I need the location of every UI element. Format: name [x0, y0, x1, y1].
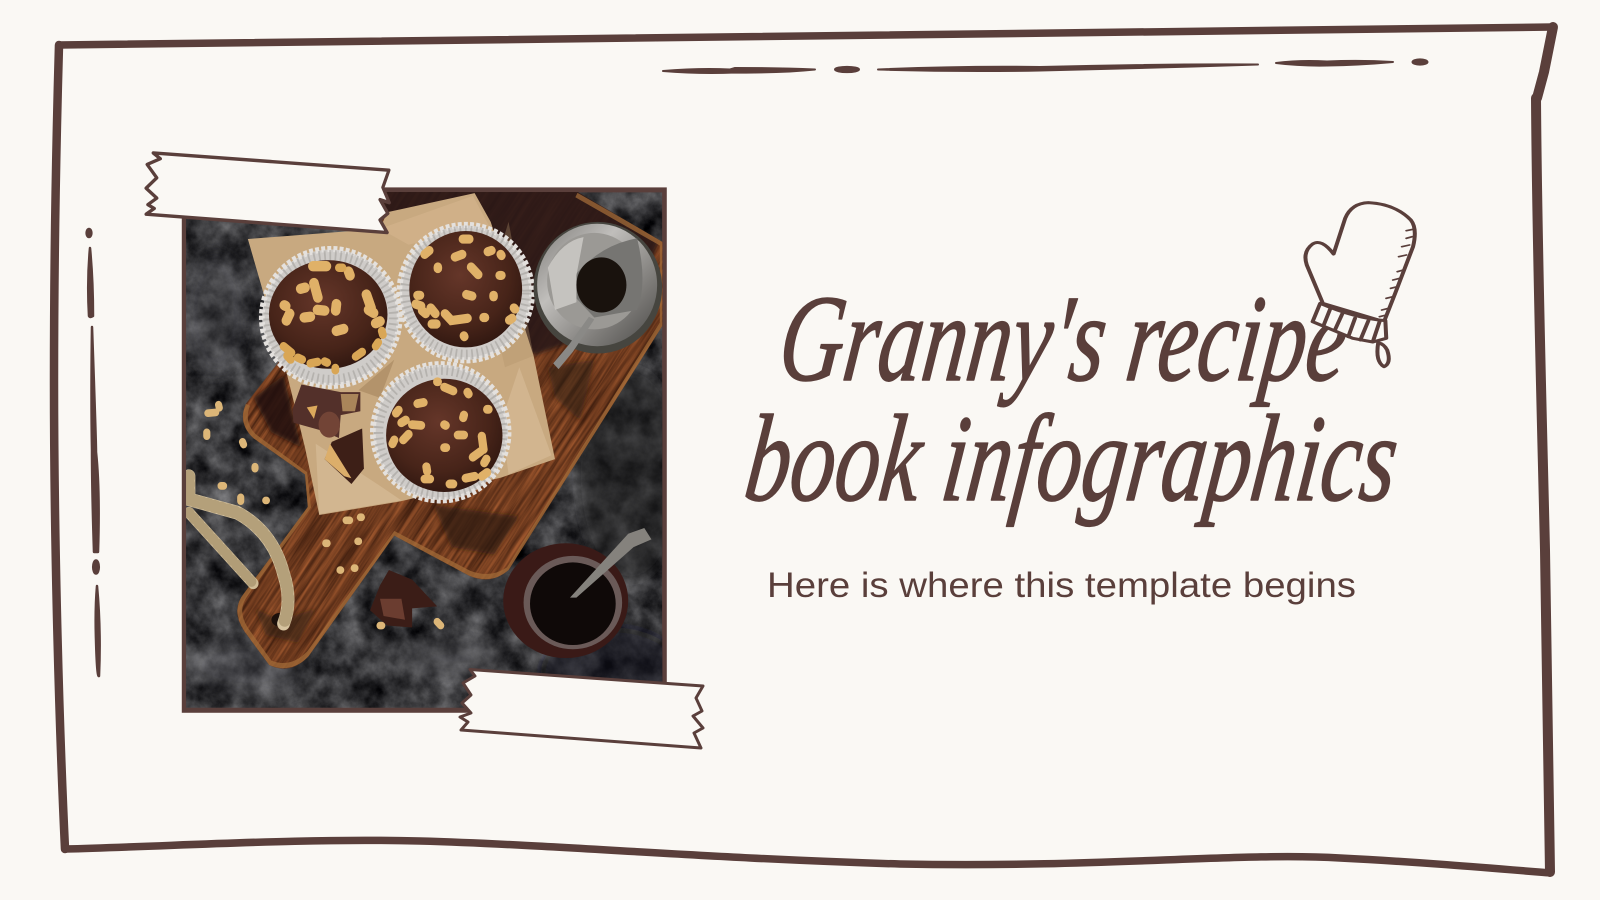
rope — [189, 476, 288, 624]
left decorative dashes — [87, 229, 100, 676]
metal jug and bowl — [534, 222, 662, 369]
title: Granny's recipe — [773, 269, 1356, 407]
photo border — [182, 187, 667, 713]
parchment paper — [248, 193, 555, 515]
muffin top right — [399, 225, 532, 360]
chocolate jar with spoon — [503, 528, 651, 658]
hole in board — [271, 612, 280, 626]
nut crumbs — [207, 405, 441, 626]
slate background — [186, 192, 662, 708]
chocolate chunks on paper — [292, 384, 364, 484]
tape: bottom right — [460, 670, 703, 748]
subtitle: Here is where this template begins — [767, 566, 1356, 605]
icon: oven mitt — [1305, 203, 1415, 367]
title — [739, 269, 1406, 527]
chocolate pieces on slate — [370, 570, 437, 627]
muffin top left — [262, 249, 400, 386]
photo: chocolate muffins on a wooden board — [144, 151, 667, 713]
muffin bottom — [373, 364, 509, 500]
top decorative dashes — [663, 59, 1428, 73]
stone shadow and light patches — [190, 254, 662, 698]
tape: top left — [146, 153, 389, 233]
cutting board — [237, 192, 662, 669]
